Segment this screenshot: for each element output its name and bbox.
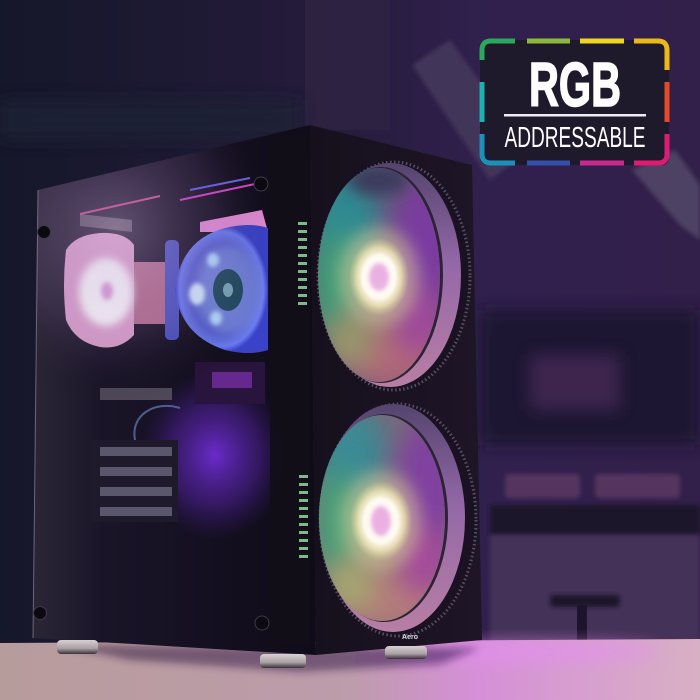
badge: RGB addressable (480, 40, 669, 165)
case internals (80, 210, 268, 522)
RGB title: RGB (529, 51, 621, 120)
case side glass panel (33, 125, 316, 655)
side mesh vents (298, 222, 308, 558)
logo: Aero (402, 634, 418, 641)
icon: blue CPU cooler fan (165, 225, 268, 353)
PC case (33, 125, 482, 668)
upper front fan (309, 160, 470, 391)
lower front fan (310, 404, 476, 636)
feet (57, 640, 427, 668)
glass sheen (33, 125, 310, 420)
internal glow (147, 380, 270, 534)
icon: pink rear fan (64, 233, 134, 348)
table surface (0, 639, 700, 700)
glass screws (34, 177, 269, 630)
rainbow border (482, 41, 667, 163)
front panel (310, 125, 482, 655)
